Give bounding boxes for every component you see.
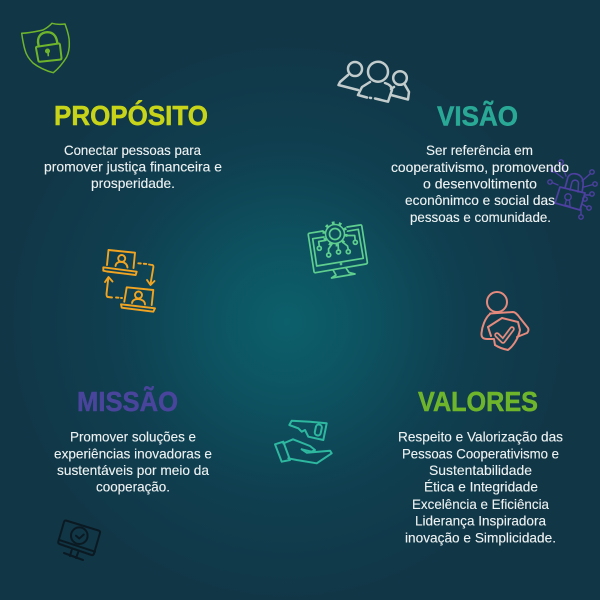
text block: propósito: Conectar pessoas para [64, 142, 201, 158]
icon: monitor with gear and circuit [308, 223, 367, 278]
heading: propósito: PROPÓSITO [54, 100, 208, 131]
heading: missão: MISSÃO [77, 386, 178, 417]
text block: visão [391, 142, 569, 225]
text block: visão: Ser referência em [426, 142, 533, 158]
icon: group of people [338, 62, 409, 102]
text block: missão: sustentáveis por meio da [57, 462, 209, 478]
text block: visão: cooperativismo, promovendo [391, 159, 569, 175]
text block: valores: Ética e Integridade [424, 479, 538, 495]
icon: shield with padlock [22, 23, 69, 73]
text block: valores: Pessoas Cooperativismo e [402, 445, 559, 461]
icon: person holding checked shield [481, 292, 528, 350]
panel: valores [398, 386, 563, 545]
text block: valores: inovação e Simplicidade. [405, 529, 556, 545]
text block: visão: pessoas e comunidade. [410, 209, 551, 225]
text block: propósito [44, 142, 222, 191]
panel: visão [391, 100, 569, 225]
text block: visão: econônimco e social das [405, 192, 555, 208]
heading: valores: VALORES [418, 386, 538, 417]
heading: visão: VISÃO [437, 100, 518, 132]
text block: missão [54, 429, 212, 495]
text block: propósito: prosperidade. [91, 175, 175, 191]
text block: valores: Excelência e Eficiência [412, 496, 549, 512]
icon: laptops exchanging users [103, 250, 155, 312]
text block: valores: Sustentabilidade [429, 462, 532, 478]
icon: monitor with check mark [58, 520, 100, 560]
text block: visão: o desenvoltimento [423, 176, 537, 192]
text block: missão: Promover soluções e [70, 429, 196, 445]
text block: missão: cooperação. [96, 479, 170, 495]
text block: valores: Respeito e Valorização das [398, 429, 563, 445]
text block: propósito: promover justiça financeira e [44, 158, 222, 174]
text block: valores [398, 429, 563, 545]
icon: circuit padlock [548, 160, 597, 219]
panel: propósito [44, 100, 222, 191]
icon: hand receiving key [275, 421, 332, 463]
text block: valores: Liderança Inspiradora [415, 513, 546, 529]
text block: missão: experiências inovadoras e [54, 445, 212, 461]
panel: missão [54, 386, 212, 495]
